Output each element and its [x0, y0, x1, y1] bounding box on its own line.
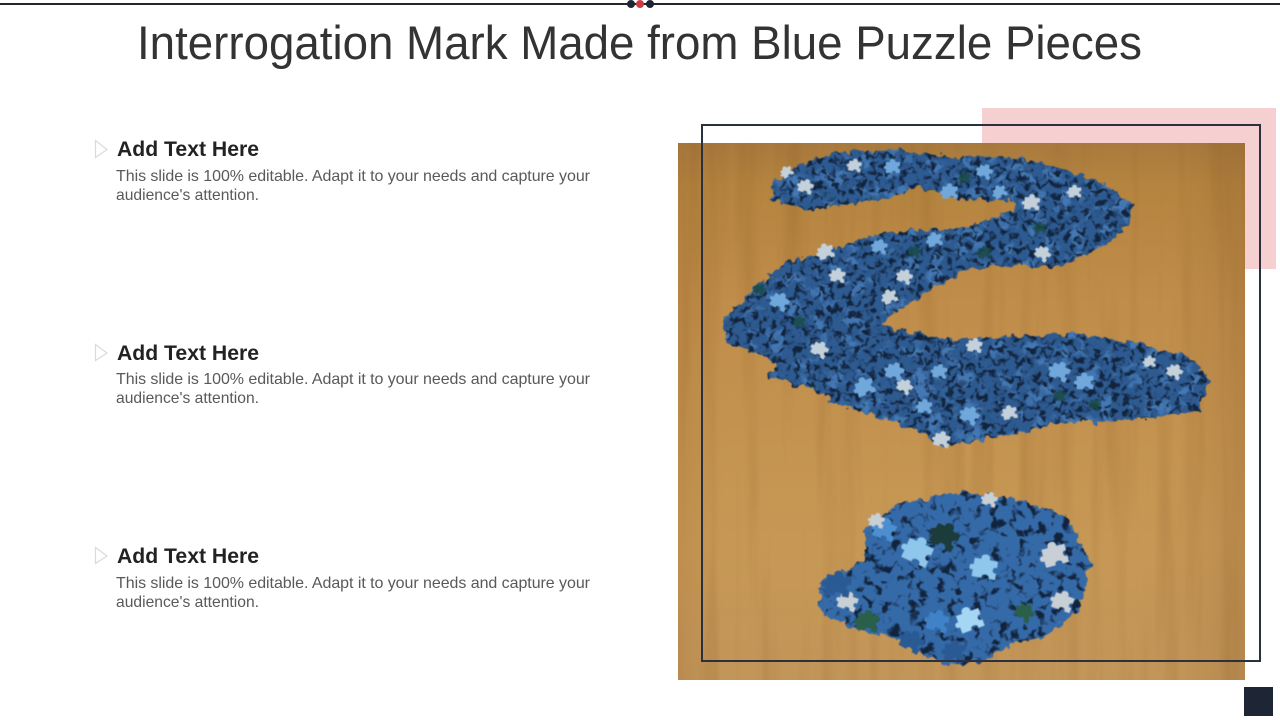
body 1: This slide is 100% editable. Adapt it to your needs and capture your [116, 168, 591, 185]
puzzle question mark curve [722, 146, 1212, 449]
photo: question mark of blue puzzle pieces on wood [678, 140, 1245, 680]
text block 3 [96, 545, 591, 611]
heading 3: Add Text Here [117, 545, 259, 568]
title: Interrogation Mark Made from Blue Puzzle Pieces [137, 16, 1142, 69]
pink backing panel [982, 108, 1276, 269]
top rule with dots [0, 0, 1280, 8]
body 2: This slide is 100% editable. Adapt it to your needs and capture your [116, 371, 591, 388]
body 3: audience's attention. [116, 594, 259, 611]
text block 2 [96, 342, 591, 407]
wooden table [678, 143, 1245, 680]
icon: triangle bullet 2 [96, 344, 107, 360]
puzzle dot pile [816, 489, 1094, 667]
corner square [1244, 687, 1273, 716]
body 1: audience's attention. [116, 187, 259, 204]
icon: triangle bullet 1 [96, 140, 107, 158]
body 3: This slide is 100% editable. Adapt it to your needs and capture your [116, 575, 591, 592]
heading 2: Add Text Here [117, 342, 259, 365]
heading 1: Add Text Here [117, 138, 259, 161]
icon: triangle bullet 3 [96, 548, 107, 564]
body 2: audience's attention. [116, 390, 259, 407]
text block 1 [96, 138, 591, 204]
thin outline frame [702, 125, 1260, 661]
